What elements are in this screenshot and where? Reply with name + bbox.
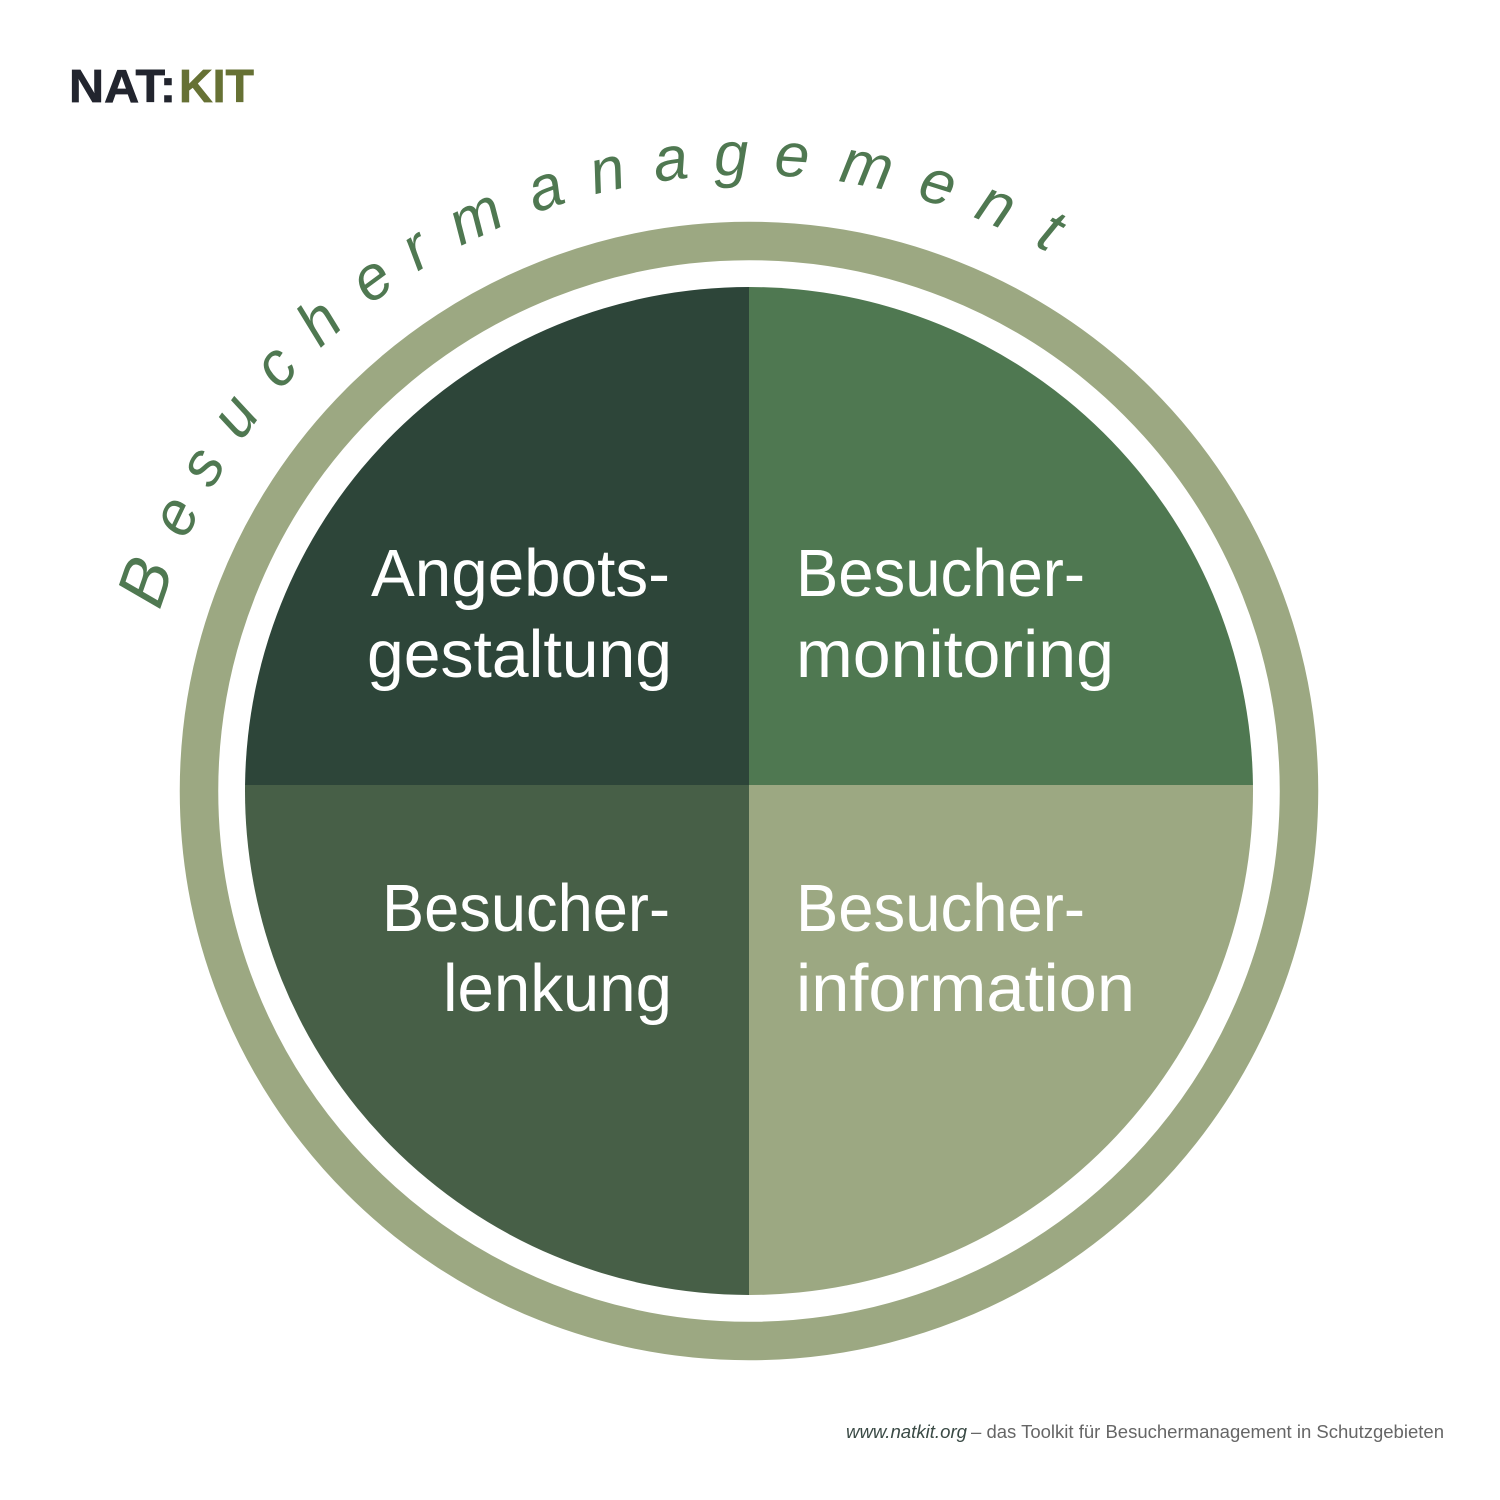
- logo: NAT:KIT: KIT: [179, 60, 254, 112]
- logo: NAT:KIT: NAT:: [69, 60, 176, 112]
- quadrant: Besucherlenkung: lenkung: [443, 951, 672, 1026]
- quadrant: Besucherinformation: Besucher-: [796, 871, 1085, 946]
- curved title: Besuchermanagement: t: [1027, 196, 1077, 266]
- curved title: Besuchermanagement: a: [518, 150, 572, 226]
- curved title: Besuchermanagement: n: [582, 133, 631, 208]
- quadrant: Besucherinformation: [749, 785, 1253, 1295]
- curved title: Besuchermanagement: [102, 120, 1077, 616]
- footer credit: www.natkit.org: [846, 1422, 967, 1442]
- curved title: Besuchermanagement: s: [164, 435, 239, 497]
- curved title: Besuchermanagement: e: [773, 120, 812, 192]
- curved title: Besuchermanagement: u: [197, 382, 273, 450]
- footer credit: – das Toolkit für Besuchermanagement in Schutzgebieten: [971, 1422, 1444, 1442]
- curved title: Besuchermanagement: a: [649, 123, 692, 196]
- quadrant: Besucherlenkung: [245, 785, 749, 1295]
- curved title: Besuchermanagement: m: [437, 174, 513, 259]
- quadrant: Angebotsgestaltung: gestaltung: [367, 617, 672, 692]
- curved title: Besuchermanagement: r: [389, 213, 444, 284]
- quadrant: Angebotsgestaltung: [245, 287, 749, 785]
- quadrant: Besucherlenkung: Besucher-: [382, 871, 670, 946]
- curved title: Besuchermanagement: e: [337, 241, 406, 317]
- curved title: Besuchermanagement: c: [239, 331, 311, 401]
- quadrant: Besuchermonitoring: monitoring: [796, 617, 1114, 692]
- quadrant: Besucherinformation: information: [796, 951, 1135, 1026]
- curved title: Besuchermanagement: e: [136, 486, 214, 546]
- curved title: Besuchermanagement: m: [835, 127, 899, 204]
- logo: NAT:KIT: [69, 60, 254, 112]
- outer ring: [199, 241, 1299, 1341]
- quadrant: Besuchermonitoring: [749, 287, 1253, 785]
- quadrant: Angebotsgestaltung: Angebots-: [371, 536, 670, 611]
- curved title: Besuchermanagement: e: [912, 145, 965, 221]
- quadrant: Besuchermonitoring: Besucher-: [796, 536, 1085, 611]
- curved title: Besuchermanagement: g: [713, 120, 749, 190]
- curved title: Besuchermanagement: n: [967, 166, 1026, 243]
- curved title: Besuchermanagement: B: [102, 548, 189, 616]
- curved title: Besuchermanagement: h: [283, 285, 355, 359]
